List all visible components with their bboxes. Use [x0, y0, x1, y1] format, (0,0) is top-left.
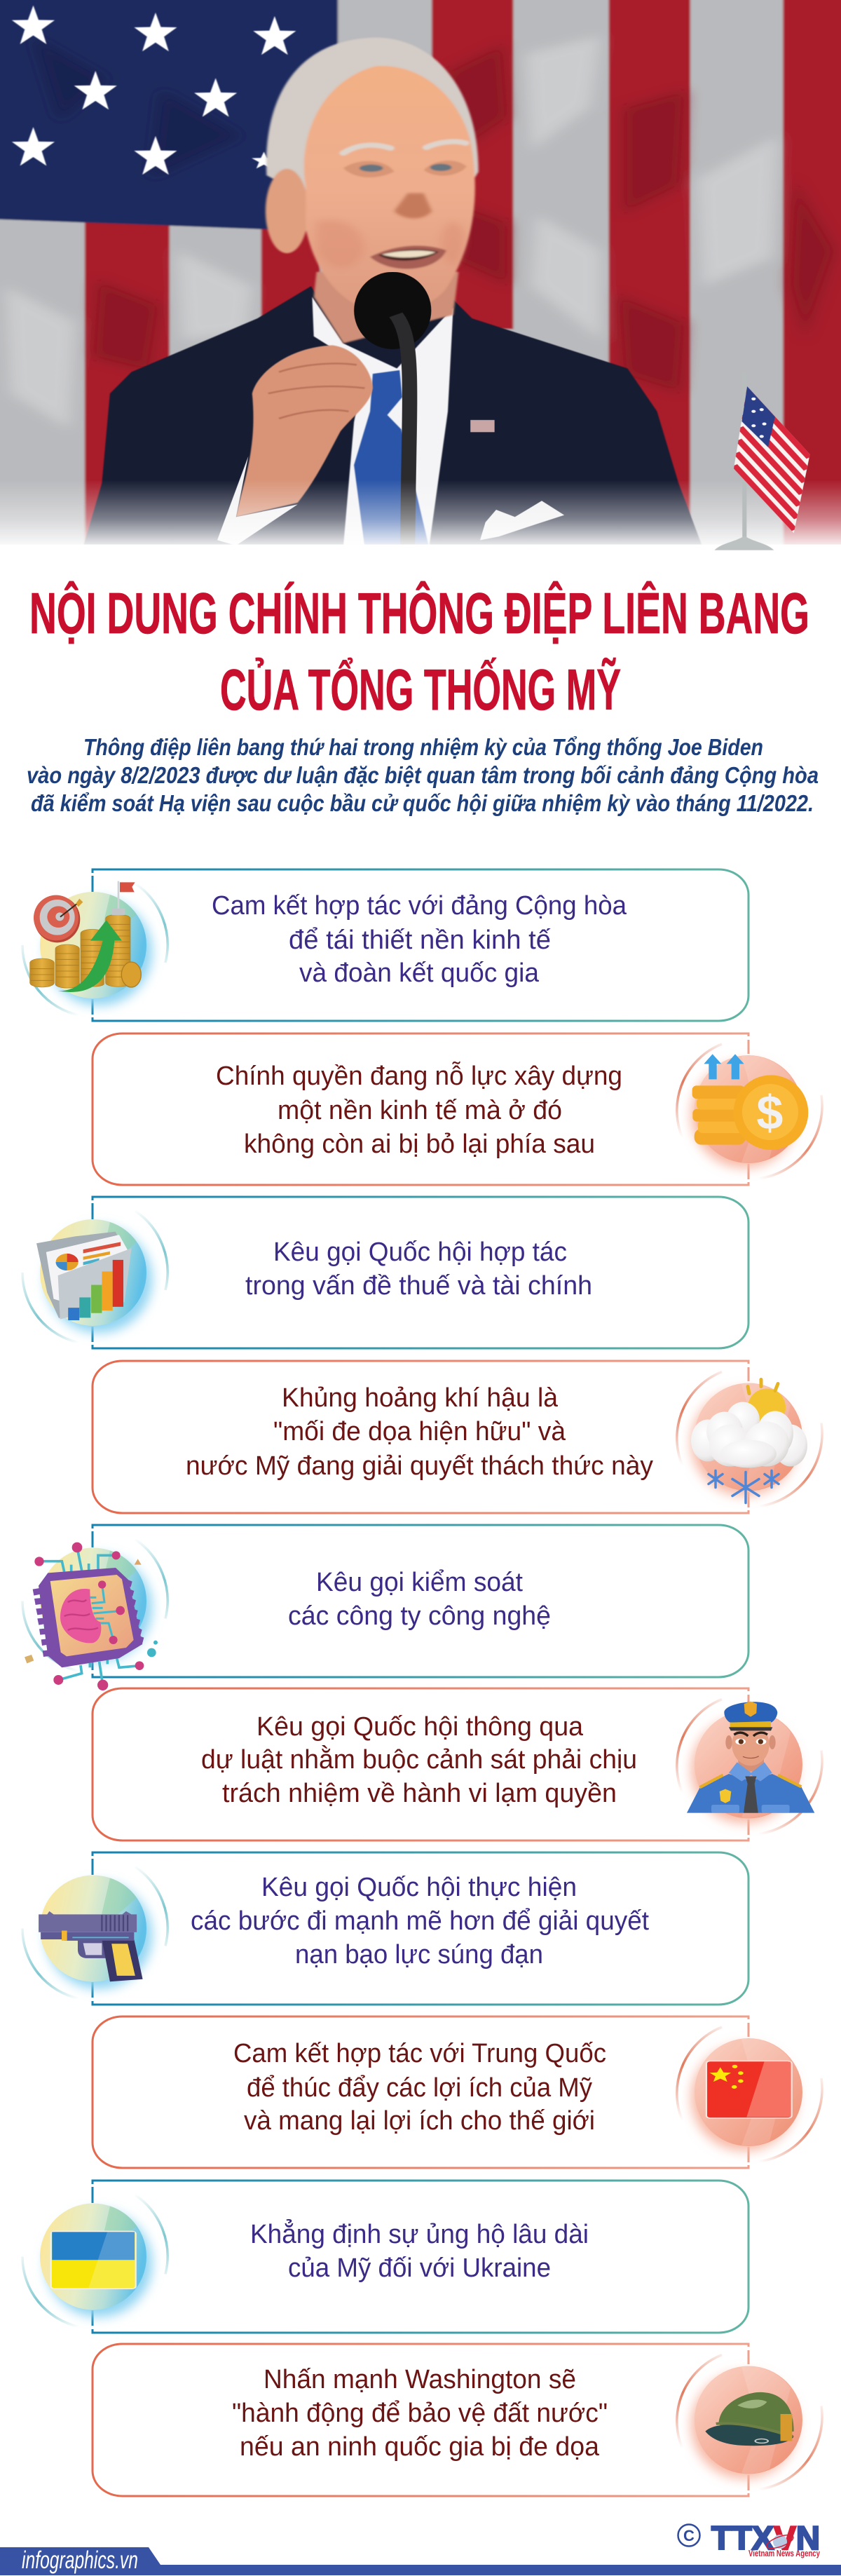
card text: Cam kết hợp tác với đảng Cộng hòa: [212, 891, 627, 921]
hero photo: speaker in front of US flag: [0, 0, 841, 587]
panel: item 9 Ukraine: [22, 2181, 748, 2333]
card border: [93, 2181, 748, 2333]
card text: để tái thiết nền kinh tế: [289, 926, 551, 955]
card text: "hành động để bảo vệ đất nước": [232, 2399, 608, 2428]
table flag: [714, 372, 810, 550]
microphone: [354, 272, 431, 548]
card border: [93, 1688, 748, 1841]
intro paragraph: [27, 734, 819, 816]
title: CỦA TỔNG THỐNG MỸ: [220, 657, 621, 722]
card text: [201, 1712, 637, 1808]
icon: gold coins with dollar sign: $: [756, 1087, 783, 1140]
card text: các công ty công nghệ: [288, 1601, 551, 1631]
card text: [186, 1383, 653, 1481]
icon: Ukraine flag: [22, 2195, 167, 2326]
card text: nếu an ninh quốc gia bị đe dọa: [240, 2432, 600, 2462]
card text: của Mỹ đối với Ukraine: [288, 2253, 551, 2283]
card border: [93, 1852, 748, 2005]
card text: [233, 2039, 606, 2136]
card text: "mối đe dọa hiện hữu" và: [273, 1417, 566, 1446]
card border: [93, 1361, 748, 1513]
card text: trong vấn đề thuế và tài chính: [245, 1271, 592, 1301]
head: [266, 38, 479, 344]
lapel pin: [470, 420, 495, 432]
card border: [93, 1033, 748, 1185]
card text: Cam kết hợp tác với Trung Quốc: [233, 2039, 606, 2068]
panel: item 5 tech companies: [22, 1525, 748, 1690]
icon: folder with charts: [22, 1211, 167, 1343]
panel: item 8 China: [93, 2016, 822, 2168]
card border: [93, 869, 748, 1021]
card text: Kêu gọi Quốc hội thực hiện: [261, 1873, 577, 1902]
card text: [250, 2218, 589, 2283]
card text: và mang lại lợi ích cho thế giới: [244, 2106, 595, 2136]
icon: cloud, sun and snow: [677, 1371, 822, 1506]
title: [29, 581, 809, 722]
card text: Kêu gọi Quốc hội hợp tác: [273, 1238, 567, 1267]
card text: Nhấn mạnh Washington sẽ: [264, 2365, 576, 2394]
card text: để thúc đẩy các lợi ích của Mỹ: [247, 2073, 592, 2103]
panel: item 7 gun violence: [22, 1852, 748, 2005]
shirt cuff: [217, 456, 298, 545]
suit: [83, 286, 703, 548]
card text: [191, 1873, 649, 1970]
icon: police officer: [677, 1700, 822, 1834]
icon: army helmet: [677, 2354, 822, 2489]
footer band: [0, 2547, 841, 2575]
bottom fade: [0, 480, 841, 545]
card text: không còn ai bị bỏ lại phía sau: [244, 1130, 595, 1159]
icon: China flag: [677, 2027, 822, 2162]
panel: item 10 national security: [93, 2344, 822, 2496]
panel: item 3 tax and finance: [22, 1197, 748, 1348]
card text: [212, 891, 627, 988]
card text: nước Mỹ đang giải quyết thách thức này: [186, 1451, 653, 1481]
flag background: [0, 0, 841, 587]
shirt collar and front: [312, 297, 453, 548]
icon: AI chip with brain: [22, 1540, 167, 1690]
icon: handgun: [22, 1866, 167, 1998]
card text: [288, 1568, 551, 1631]
card text: Khẳng định sự ủng hộ lâu dài: [250, 2218, 589, 2249]
flag stars: [12, 6, 296, 175]
card text: [216, 1061, 622, 1159]
icon: coin stacks, target and arrow: [22, 881, 167, 1015]
card border: [93, 1197, 748, 1348]
panel: item 6 police accountability: [93, 1688, 822, 1841]
panel: item 2 inclusive economy: [93, 1033, 822, 1185]
card text: trách nhiệm về hành vi lạm quyền: [222, 1779, 617, 1808]
card text: [232, 2365, 608, 2462]
card text: Kêu gọi Quốc hội thông qua: [257, 1712, 584, 1742]
card text: nạn bạo lực súng đạn: [295, 1940, 543, 1970]
card text: [245, 1238, 592, 1301]
necktie: [354, 370, 429, 548]
raised hand: [236, 345, 373, 517]
card border: [93, 2344, 748, 2496]
pocket square: [480, 501, 564, 540]
panel: item 1 economy: [22, 869, 748, 1021]
card border: [93, 1525, 748, 1677]
card text: một nền kinh tế mà ở đó: [278, 1096, 562, 1125]
card text: các bước đi mạnh mẽ hơn để giải quyết: [191, 1906, 649, 1936]
card text: và đoàn kết quốc gia: [299, 958, 540, 988]
card text: dự luật nhằm buộc cảnh sát phải chịu: [201, 1744, 637, 1775]
card text: Khủng hoảng khí hậu là: [282, 1383, 559, 1413]
card text: Chính quyền đang nỗ lực xây dựng: [216, 1061, 622, 1091]
logo: TTXVN Vietnam News Agency: TTXVN: [711, 2519, 820, 2556]
panel: item 4 climate: [93, 1361, 822, 1513]
icon: gold coins with dollar sign: [677, 1044, 822, 1179]
card text: Kêu gọi kiểm soát: [316, 1568, 523, 1597]
logo: TTXVN Vietnam News Agency: C: [683, 2527, 695, 2544]
website label: infographics.vn: [22, 2547, 138, 2574]
card border: [93, 2016, 748, 2168]
